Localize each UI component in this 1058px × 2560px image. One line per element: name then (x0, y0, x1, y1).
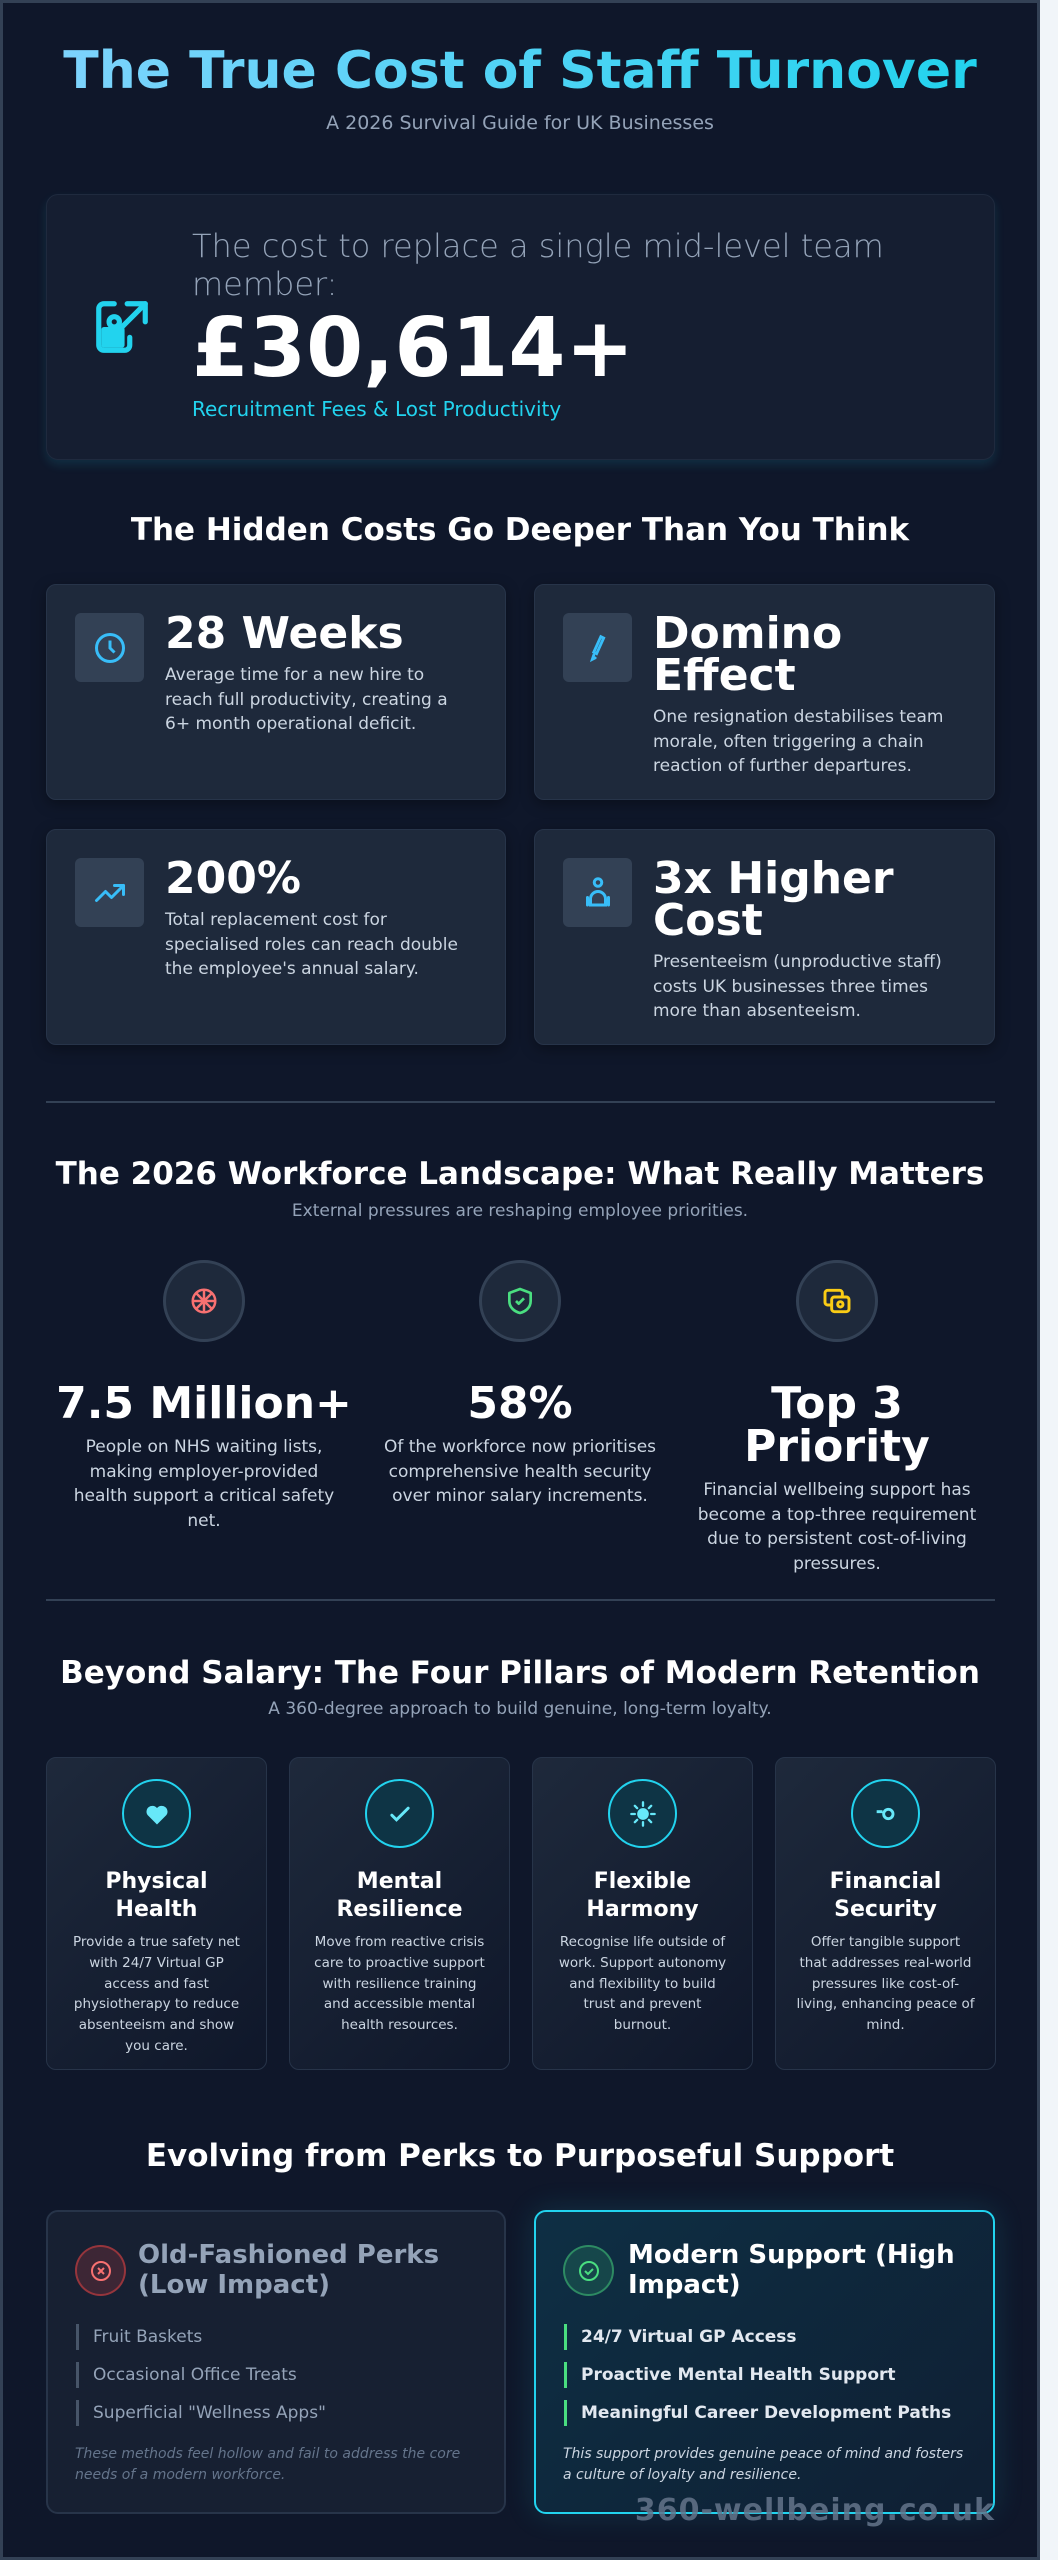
panel: old perks (46, 2210, 506, 2514)
hero text (192, 227, 884, 421)
pillar: physical: Health (116, 1897, 197, 1922)
stat: 7.5 million (56, 1260, 352, 1530)
stat: top 3: Top 3 (771, 1378, 903, 1429)
pillar: financial: Financial (830, 1869, 941, 1894)
icon: check (365, 1779, 434, 1848)
hero text: Recruitment Fees & Lost Productivity (192, 397, 561, 421)
title: The True Cost of Staff Turnover (63, 41, 977, 101)
panel: modern support: Meaningful Career Development Paths (581, 2403, 951, 2423)
heading: Modern Support (High (628, 2240, 955, 2270)
pillar: physical: Provide a true safety net with 24/7 Virtual GP access and fast physiotherapy to reduce absenteeism and show you care. (73, 1934, 240, 2054)
stat: top 3 (698, 1260, 976, 1574)
heading: hidden costs: The Hidden Costs Go Deeper Than You Think (131, 512, 909, 548)
card: 200%: Total replacement cost for specialised roles can reach double the employee's annual salary. (165, 910, 458, 979)
panel: modern support: Proactive Mental Health Support (581, 2365, 896, 2385)
pillar: mental: Resilience (336, 1897, 463, 1922)
list: Fruit Baskets (93, 2327, 202, 2347)
pillar: mental: Mental (357, 1869, 442, 1894)
card: 200% (46, 829, 506, 1045)
pillar: mental (289, 1757, 510, 2070)
icon: check (563, 2245, 614, 2296)
heading (138, 2240, 439, 2300)
panel: modern support (534, 2210, 995, 2514)
watermark: 360-wellbeing.co.uk (635, 2493, 995, 2528)
heading: workforce landscape: The 2026 Workforce Landscape: What Really Matters (56, 1156, 984, 1192)
list: 24/7 Virtual GP Access (581, 2327, 797, 2347)
card: 3x: 3x Higher Cost (653, 853, 894, 946)
pillar: flexible: Harmony (586, 1897, 699, 1922)
heading: evolving: Evolving from Perks to Purposeful Support (146, 2138, 894, 2174)
icon: hand with arrow (96, 301, 148, 353)
subtitle: A 2026 Survival Guide for UK Businesses (326, 112, 714, 134)
card: domino: Domino Effect (653, 608, 842, 701)
heading: four pillars: Beyond Salary: The Four Pillars of Modern Retention (60, 1655, 980, 1691)
card: 3x: Presenteeism (unproductive staff) costs UK businesses three times more than absenteeism. (653, 952, 942, 1021)
list (76, 2324, 202, 2350)
heading: Old-Fashioned Perks (138, 2240, 439, 2270)
stat: 58% (384, 1260, 656, 1506)
icon: heart (122, 1779, 191, 1848)
card: 28 weeks: Average time for a new hire to reach full productivity, creating a 6+ month operational deficit. (165, 665, 448, 734)
stat: 7.5 million: People on NHS waiting lists, making employer-provided health support a critical safety net. (74, 1437, 334, 1530)
card: domino (534, 584, 995, 800)
pillar: flexible (532, 1757, 753, 2070)
icon: domino (563, 613, 632, 682)
footnote: These methods feel hollow and fail to address the core needs of a modern workforce. (75, 2446, 460, 2483)
pillar: flexible: Recognise life outside of work. Support autonomy and flexibility to build trust and prevent burnout. (559, 1934, 726, 2033)
card: domino: One resignation destabilises team morale, often triggering a chain reaction of further departures. (653, 707, 943, 776)
pillar: physical: Physical (105, 1869, 208, 1894)
pillar: financial: Offer tangible support that addresses real-world pressures like cost-of-living, enhancing peace of mind. (797, 1934, 974, 2033)
card: 200%: 200% (165, 853, 301, 904)
pillar: mental: Move from reactive crisis care to proactive support with resilience training and accessible mental health resources. (314, 1934, 485, 2033)
stat: 7.5 million: 7.5 Million+ (56, 1378, 352, 1429)
icon: person (563, 858, 632, 927)
panel: old perks: Occasional Office Treats (93, 2365, 297, 2385)
subtitle: A 360-degree approach to build genuine, long-term loyalty. (268, 1699, 772, 1719)
icon: sun (608, 1779, 677, 1848)
card: 3x (534, 829, 995, 1045)
heading: Impact) (628, 2270, 741, 2300)
icon: money (796, 1260, 878, 1342)
stat: top 3: Financial wellbeing support has become a top-three requirement due to persistent cost-of-living pressures. (698, 1480, 976, 1574)
pillar: financial: Security (834, 1897, 937, 1922)
icon: clock (75, 613, 144, 682)
icon: shield (479, 1260, 561, 1342)
hero text: The cost to replace a single mid-level team member: (192, 227, 884, 303)
heading (628, 2240, 955, 2300)
card: 28 weeks: 28 Weeks (165, 608, 404, 659)
subtitle: External pressures are reshaping employee priorities. (292, 1201, 748, 1221)
icon: piggy (851, 1779, 920, 1848)
hero text: £30,614+ (192, 301, 634, 396)
card: 28 weeks (46, 584, 506, 800)
hero card (46, 194, 995, 460)
icon: trend (75, 858, 144, 927)
stat: 58%: 58% (467, 1378, 573, 1429)
icon: x (75, 2245, 126, 2296)
heading: (Low Impact) (138, 2270, 330, 2300)
stat: top 3: Priority (744, 1421, 930, 1472)
pillar: physical (46, 1757, 267, 2070)
panel: old perks: Superficial "Wellness Apps" (93, 2403, 326, 2423)
stat: 58%: Of the workforce now prioritises comprehensive health security over minor salary increments. (384, 1437, 656, 1506)
pillar: flexible: Flexible (594, 1869, 691, 1894)
pillar: financial (775, 1757, 996, 2070)
footnote: This support provides genuine peace of mind and fosters a culture of loyalty and resilience. (563, 2446, 963, 2483)
icon: medical (163, 1260, 245, 1342)
